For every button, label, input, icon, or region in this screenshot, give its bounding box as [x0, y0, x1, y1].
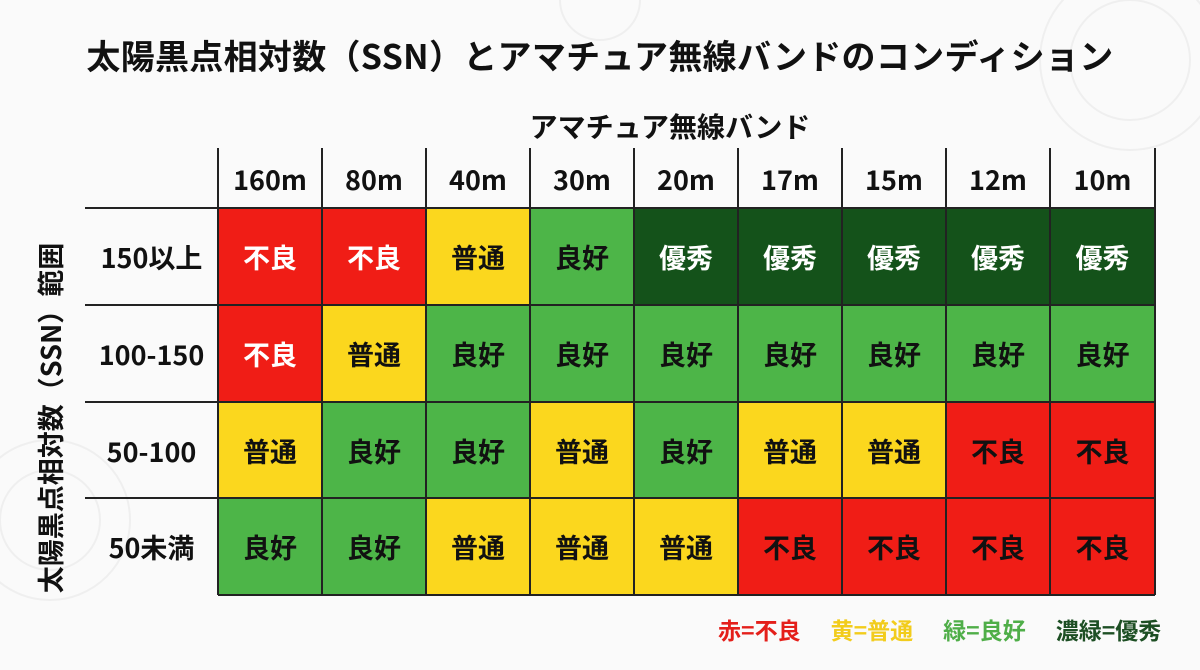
table grid: 優秀 [867, 237, 921, 276]
table grid: 150以上 [101, 237, 202, 276]
table grid: 普通 [555, 527, 609, 566]
table grid: 不良 [1076, 527, 1130, 566]
table grid: 10m [1074, 158, 1131, 198]
table grid: 40m [449, 158, 507, 198]
table grid: 不良 [763, 527, 817, 566]
table grid: 不良 [971, 430, 1025, 470]
table grid: 100-150 [99, 334, 204, 373]
table grid: 良好 [971, 334, 1025, 373]
table grid: 普通 [347, 334, 401, 373]
row: 50-100 [219, 403, 1154, 497]
table grid: 普通 [867, 430, 921, 470]
legend: 赤=不良 黄=普通 緑=良好 濃緑=優秀 [718, 612, 1161, 646]
table grid: 優秀 [763, 237, 817, 276]
table grid: 良好 [555, 237, 609, 276]
table grid: 20m [657, 158, 715, 198]
table grid: 普通 [659, 527, 713, 566]
row: 150以上 [219, 209, 1154, 304]
table grid: 優秀 [659, 237, 713, 276]
table grid: 不良 [243, 334, 297, 373]
table grid: 160m [233, 158, 307, 198]
table grid: 不良 [1076, 430, 1130, 470]
table grid: 普通 [763, 430, 817, 470]
table grid: 良好 [555, 334, 609, 373]
table grid: 30m [553, 158, 611, 198]
table grid: 普通 [243, 430, 297, 470]
column axis heading: アマチュア無線バンド [530, 106, 810, 146]
table grid: 普通 [555, 430, 609, 470]
table grid: 良好 [243, 527, 297, 566]
table grid: 15m [865, 158, 923, 198]
table grid: 良好 [451, 430, 505, 470]
table grid: 50未満 [109, 527, 194, 566]
table grid: 不良 [867, 527, 921, 566]
table grid: 良好 [659, 334, 713, 373]
row labels [99, 237, 204, 566]
row axis heading: 太陽黒点相対数（SSN）範囲 [30, 243, 69, 593]
table grid: 普通 [451, 527, 505, 566]
table grid: 優秀 [971, 237, 1025, 276]
table grid: 良好 [867, 334, 921, 373]
table grid: 良好 [659, 430, 713, 470]
title: 太陽黒点相対数（SSN）とアマチュア無線バンドのコンディション [86, 30, 1114, 79]
table grid: 普通 [451, 237, 505, 276]
header row [233, 158, 1131, 198]
table grid: 17m [761, 158, 819, 198]
table grid: 12m [969, 158, 1027, 198]
table grid: 良好 [347, 527, 401, 566]
table grid: 50-100 [107, 430, 196, 470]
table grid: 不良 [971, 527, 1025, 566]
row: 100-150 [219, 306, 1154, 401]
table grid: 良好 [347, 430, 401, 470]
table grid: 良好 [1076, 334, 1130, 373]
table grid: 80m [345, 158, 403, 198]
table grid: 優秀 [1076, 237, 1130, 276]
table grid: 良好 [451, 334, 505, 373]
table grid: 不良 [243, 237, 297, 276]
table grid: 良好 [763, 334, 817, 373]
table grid: 不良 [347, 237, 401, 276]
row: 50未満 [219, 499, 1154, 594]
